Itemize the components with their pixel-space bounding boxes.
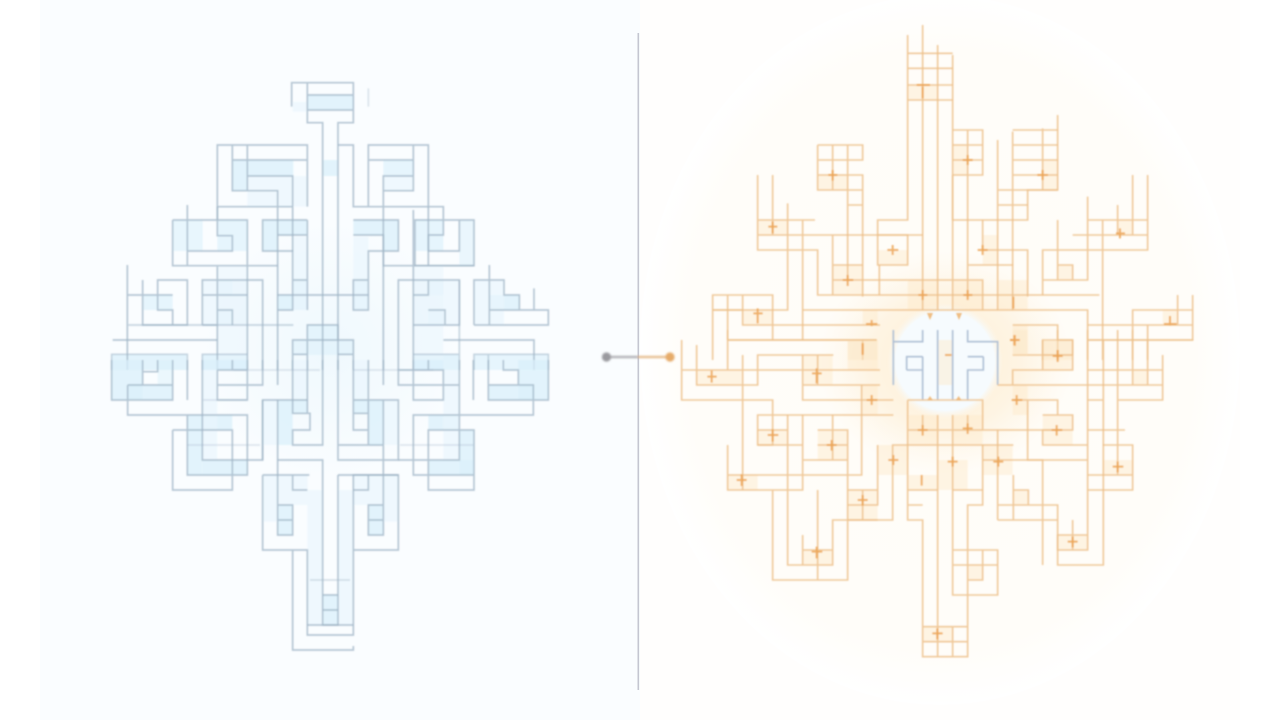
- panel: right background: [640, 0, 1240, 720]
- center blue lines: [893, 330, 998, 400]
- lower fills: [112, 360, 548, 625]
- upper lines: [713, 25, 1193, 360]
- right background glow: [640, 0, 1240, 705]
- left blue branching structure: [112, 83, 548, 650]
- connector grey segment: [606, 356, 638, 358]
- left structure: upper half: [112, 83, 548, 370]
- upper fills: [112, 95, 548, 370]
- upper node squares: [743, 85, 1178, 360]
- connector orange segment: [638, 356, 670, 358]
- core top notches: [927, 313, 962, 320]
- right structure: upper half: [713, 25, 1193, 360]
- central cool core: [887, 303, 1003, 419]
- center divider: [638, 33, 639, 690]
- lower lines: [682, 330, 1193, 657]
- left center glow: [200, 220, 460, 480]
- upper node crosses: [753, 85, 1177, 360]
- orange dot: [665, 352, 675, 362]
- right structure: lower half: [682, 330, 1193, 657]
- connector arrow: [602, 352, 675, 362]
- core notches: [927, 396, 961, 400]
- panel: left background: [40, 0, 640, 720]
- lower node squares: [697, 330, 1148, 642]
- left structure: lower half: [112, 360, 548, 650]
- central warm glow: [817, 250, 1073, 474]
- grey dot: [602, 352, 611, 362]
- lower lines: [112, 360, 548, 650]
- upper lines: [112, 83, 548, 370]
- lower node crosses: [707, 335, 1123, 639]
- right orange branching structure: [682, 25, 1193, 657]
